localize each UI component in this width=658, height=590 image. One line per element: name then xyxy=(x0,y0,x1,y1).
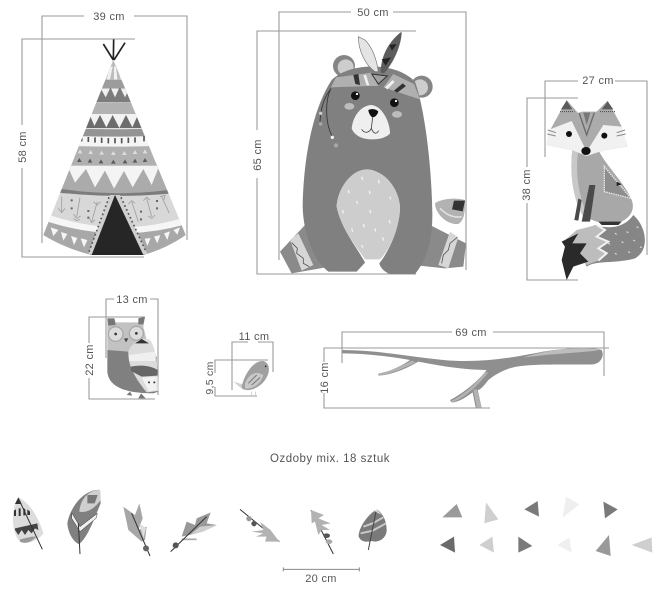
belly xyxy=(337,169,400,259)
owl dimension lines xyxy=(84,294,158,399)
fox dimension lines: 38 cm xyxy=(521,169,533,201)
teepee dimension lines: 39 cm xyxy=(93,11,125,23)
branch dimension lines: 69 cm xyxy=(455,327,487,339)
owl dimension lines: 22 cm xyxy=(84,344,96,376)
fox illustration xyxy=(547,100,645,280)
chest pattern xyxy=(604,167,631,198)
bear dimension lines xyxy=(252,7,466,274)
face xyxy=(351,91,360,100)
feather 5 xyxy=(240,509,279,542)
bear illustration xyxy=(280,32,466,274)
feather 4 xyxy=(171,512,217,552)
scale label: 20 cm xyxy=(305,573,337,585)
panel: bear xyxy=(252,7,466,274)
bear dimension lines: 50 cm xyxy=(357,7,389,19)
bird dimension lines: 11 cm xyxy=(239,331,269,343)
headband xyxy=(331,73,420,99)
body xyxy=(303,66,432,274)
tail dots xyxy=(608,227,642,254)
branch dimension lines: 16 cm xyxy=(319,362,331,394)
panel: fox xyxy=(521,75,647,280)
feathers xyxy=(358,37,378,72)
fox dimension lines: 27 cm xyxy=(582,75,614,87)
body xyxy=(571,150,633,224)
legs xyxy=(280,225,330,273)
panel: branch xyxy=(319,327,609,408)
panel: owl xyxy=(84,294,158,399)
feather 3 xyxy=(123,503,150,556)
teepee dimension lines: 58 cm xyxy=(17,131,29,163)
tail feather xyxy=(435,199,465,224)
bird illustration xyxy=(233,361,269,395)
scale bar xyxy=(283,567,359,571)
beads xyxy=(320,88,332,137)
tail xyxy=(575,215,645,267)
panel: bird xyxy=(204,331,273,396)
panel: teepee xyxy=(18,12,188,258)
teepee illustration xyxy=(44,39,186,255)
feather 2 xyxy=(67,490,101,554)
legs xyxy=(574,185,595,222)
owl illustration xyxy=(107,317,158,398)
ears xyxy=(333,55,355,77)
teepee dimension lines xyxy=(17,11,187,257)
bird dimension lines xyxy=(204,331,273,396)
door xyxy=(88,195,147,254)
confetti triangles xyxy=(440,497,652,556)
feather 7 xyxy=(359,509,387,550)
branch dimension lines xyxy=(319,327,609,408)
feather 1 xyxy=(13,497,43,549)
head xyxy=(547,100,627,156)
bird dimension lines: 9,5 cm xyxy=(204,361,216,395)
owl dimension lines: 13 cm xyxy=(116,294,148,306)
feathers row xyxy=(13,490,387,571)
heading: decorations: Ozdoby mix. 18 sztuk xyxy=(270,453,390,465)
branch illustration xyxy=(342,348,603,408)
poles xyxy=(103,39,125,60)
feather 6 xyxy=(311,510,333,554)
arrows on teepee xyxy=(58,195,169,223)
bear dimension lines: 65 cm xyxy=(252,139,264,171)
fox dimension lines xyxy=(521,75,647,280)
